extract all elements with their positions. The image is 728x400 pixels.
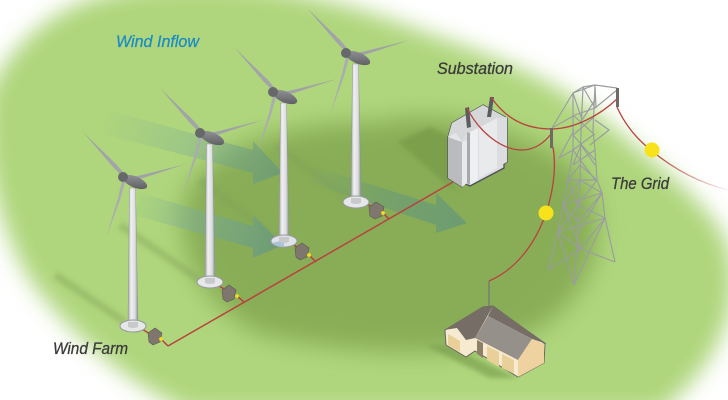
label: Wind Farm: Wind Farm (53, 339, 128, 358)
generator boxes (148, 202, 384, 345)
label: Substation: Substation (437, 59, 513, 78)
label: Wind Inflow: Wind Inflow (116, 32, 201, 51)
substation shadow (398, 127, 460, 193)
turbine ground shadows (55, 145, 348, 322)
turbine 2 (160, 88, 263, 288)
wind arrow upper (100, 108, 283, 184)
turbine 1 (83, 132, 186, 332)
turbine 4 (307, 8, 410, 208)
insulators (550, 88, 619, 148)
dark central shaded ground (182, 117, 598, 353)
transmission tower (548, 85, 617, 285)
turbine 3 (234, 47, 337, 247)
house (425, 306, 547, 378)
generator yellow indicators (159, 211, 385, 341)
wind arrow right (310, 165, 467, 233)
power cable (142, 182, 453, 346)
yellow connection dots (538, 142, 660, 220)
service drop to house (488, 281, 490, 306)
label: The Grid: The Grid (611, 174, 669, 193)
wind arrow lower (130, 190, 283, 258)
overhead wires (467, 97, 728, 281)
substation transformer (448, 97, 507, 187)
bushings (465, 97, 494, 128)
